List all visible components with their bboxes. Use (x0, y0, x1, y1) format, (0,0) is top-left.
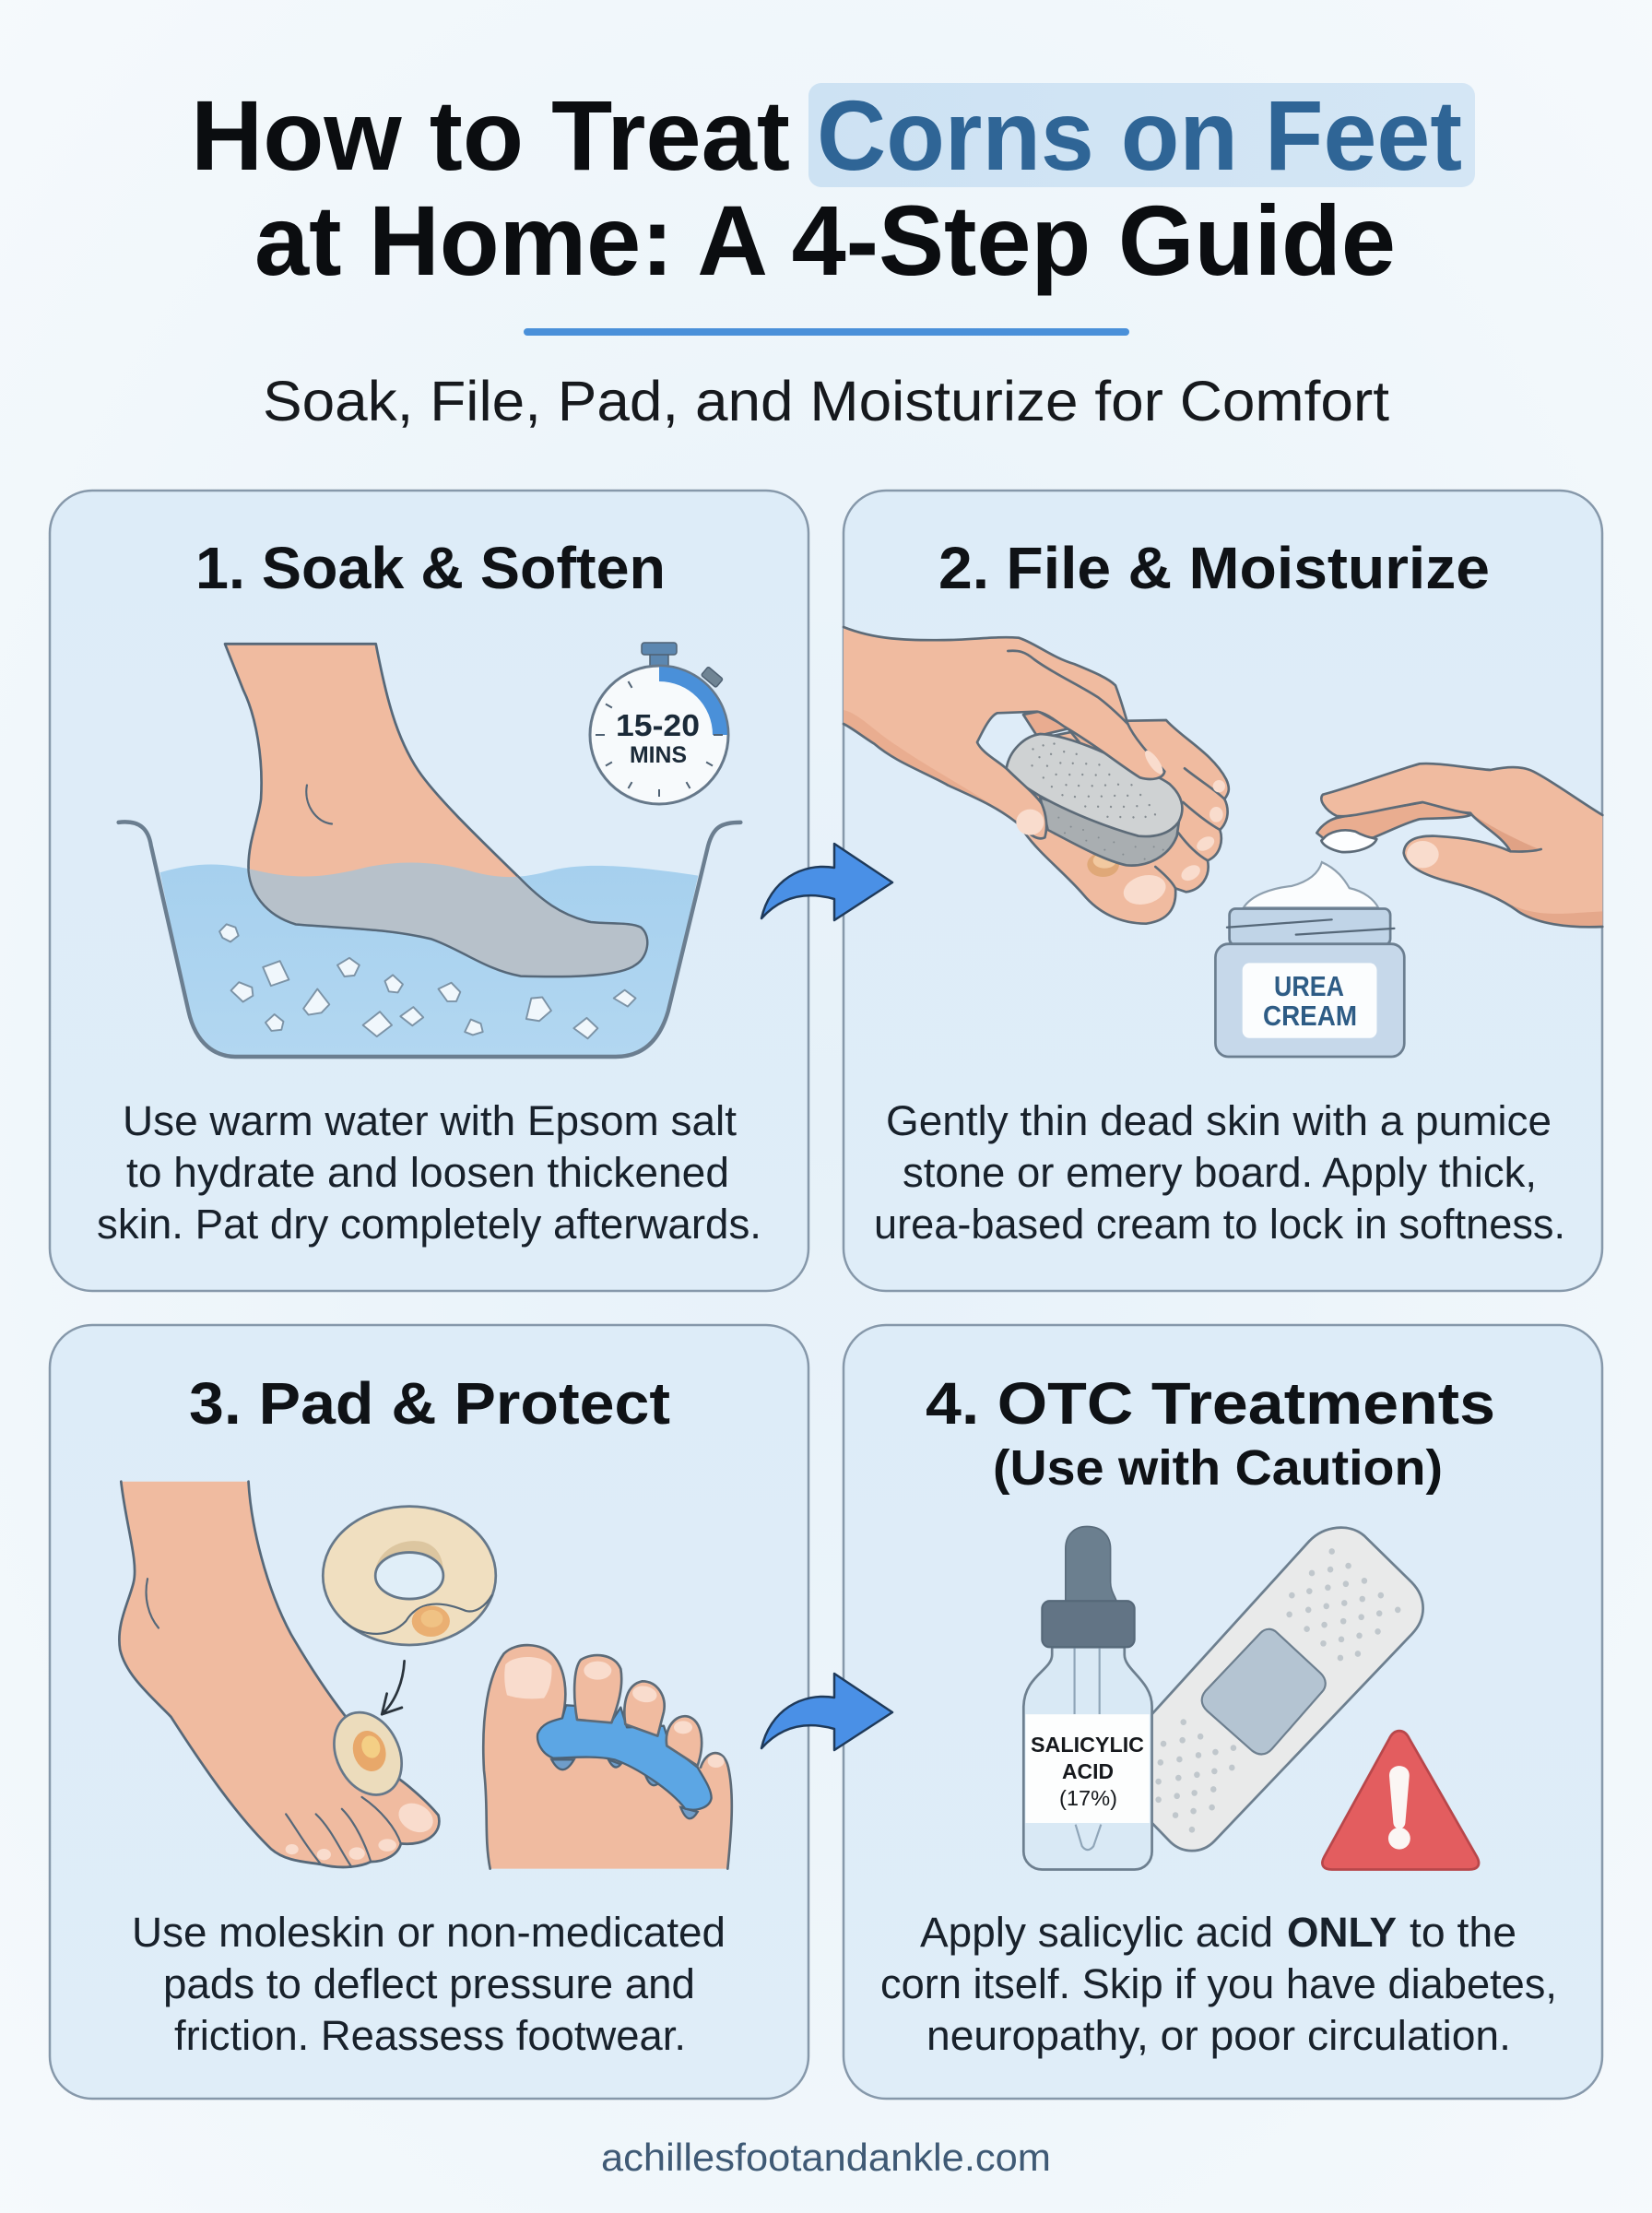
body text 2: stone or emery board. Apply thick, (903, 1149, 1537, 1196)
donut pad (323, 1507, 496, 1645)
body text 2: Gently thin dead skin with a pumice (886, 1097, 1552, 1144)
jar label text: UREA (1274, 970, 1344, 1002)
arrow: pad to toe (382, 1661, 405, 1714)
salt crystals (219, 924, 636, 1038)
cream jar (1215, 862, 1404, 1057)
body text 4: neuropathy, or poor circulation. (926, 2012, 1511, 2059)
panel: step 3 pad and protect (50, 1325, 808, 2099)
heading 2: 2. File & Moisturize (938, 535, 1490, 601)
body text 4 (880, 1909, 1557, 2059)
icon: stopwatch 15-20 mins: 15-20 (616, 708, 700, 742)
bottle label text (1031, 1733, 1144, 1810)
foot with toe spreader (483, 1645, 732, 1869)
illustration: pumice stone and hand on foot (844, 627, 1229, 924)
toe spreader (537, 1705, 712, 1810)
card 2 background (844, 491, 1602, 1291)
body text 3: Use moleskin or non-medicated (132, 1909, 726, 1956)
icon: stopwatch 15-20 mins (590, 643, 728, 804)
illustration: foot soaking in basin (119, 644, 740, 1057)
foot with toes (1025, 720, 1229, 924)
back finger (1316, 802, 1472, 839)
title (191, 79, 1475, 296)
basin (119, 822, 740, 1057)
foot base (483, 1645, 732, 1869)
bottle label text: ACID (1062, 1759, 1114, 1783)
spreader prongs (551, 1759, 698, 1818)
panel: step 1 soak and soften (50, 491, 808, 1291)
heading 4 caution note: (Use with Caution) (993, 1440, 1443, 1496)
medicated bandage (1129, 1528, 1423, 1851)
cream on fingertip (1321, 830, 1376, 852)
body text 4: ONLY (1287, 1909, 1397, 1956)
jar label text (1263, 970, 1357, 1032)
fingers behind pumice (1023, 712, 1108, 753)
corn on foot (1087, 852, 1119, 877)
arrow: step 3 to step 4 (761, 1674, 892, 1750)
foot side view (119, 1482, 439, 1867)
illustration: foot with moleskin pad and donut pad (119, 1482, 496, 1867)
illustration: bottle, bandage and warning (1023, 1527, 1479, 1869)
toe nails (504, 1657, 725, 1768)
card 3 background (50, 1325, 808, 2099)
bottle label text: SALICYLIC (1031, 1733, 1144, 1757)
body text 2 (874, 1097, 1565, 1248)
title line 1 highlighted part: Corns on Feet (817, 79, 1462, 191)
body text 2: urea-based cream to lock in softness. (874, 1201, 1565, 1248)
jar label text: CREAM (1263, 1000, 1357, 1032)
heading 4: 4. OTC Treatments (926, 1370, 1495, 1437)
illustration: hand with cream (1316, 763, 1602, 927)
subtitle: Soak, File, Pad, and Moisturize for Comfort (263, 370, 1389, 432)
bottle label text: (17%) (1059, 1786, 1117, 1810)
body text 4: Apply salicylic acid (920, 1909, 1273, 1956)
panel: step 4 otc treatments (844, 1325, 1602, 2099)
body text 1 (97, 1097, 761, 1248)
body text 3: pads to deflect pressure and (163, 1960, 695, 2007)
body text 3 (132, 1909, 726, 2059)
footer website: achillesfootandankle.com (601, 2136, 1051, 2179)
body text 3: friction. Reassess footwear. (174, 2012, 686, 2059)
heading 1: 1. Soak & Soften (195, 535, 666, 601)
moleskin on foot (321, 1700, 415, 1807)
title highlight (808, 83, 1475, 187)
pumice stone (1007, 734, 1182, 866)
title line 2: at Home: A 4-Step Guide (254, 184, 1396, 296)
body text 1: skin. Pat dry completely afterwards. (97, 1201, 761, 1248)
submerged foot tint (249, 863, 647, 976)
toenails (286, 1798, 438, 1860)
foot (225, 644, 647, 976)
panel: step 2 file and moisturize (844, 491, 1602, 1291)
toenails (1120, 780, 1225, 909)
body text 1: to hydrate and loosen thickened (126, 1149, 729, 1196)
arrow: step 1 to step 2 (761, 844, 892, 920)
warning triangle (1322, 1731, 1479, 1869)
dropper bottle (1023, 1527, 1152, 1869)
body text 4: to the (1410, 1909, 1516, 1956)
water (160, 863, 698, 1057)
title line 1 dark part: How to Treat (191, 79, 790, 191)
body text 1: Use warm water with Epsom salt (123, 1097, 737, 1144)
heading 3: 3. Pad & Protect (189, 1370, 670, 1437)
holding hand (844, 627, 1166, 838)
body text 4: corn itself. Skip if you have diabetes, (880, 1960, 1557, 2007)
card 4 background (844, 1325, 1602, 2099)
card 1 background (50, 491, 808, 1291)
small toes (574, 1655, 702, 1766)
icon: stopwatch 15-20 mins: MINS (630, 742, 687, 768)
